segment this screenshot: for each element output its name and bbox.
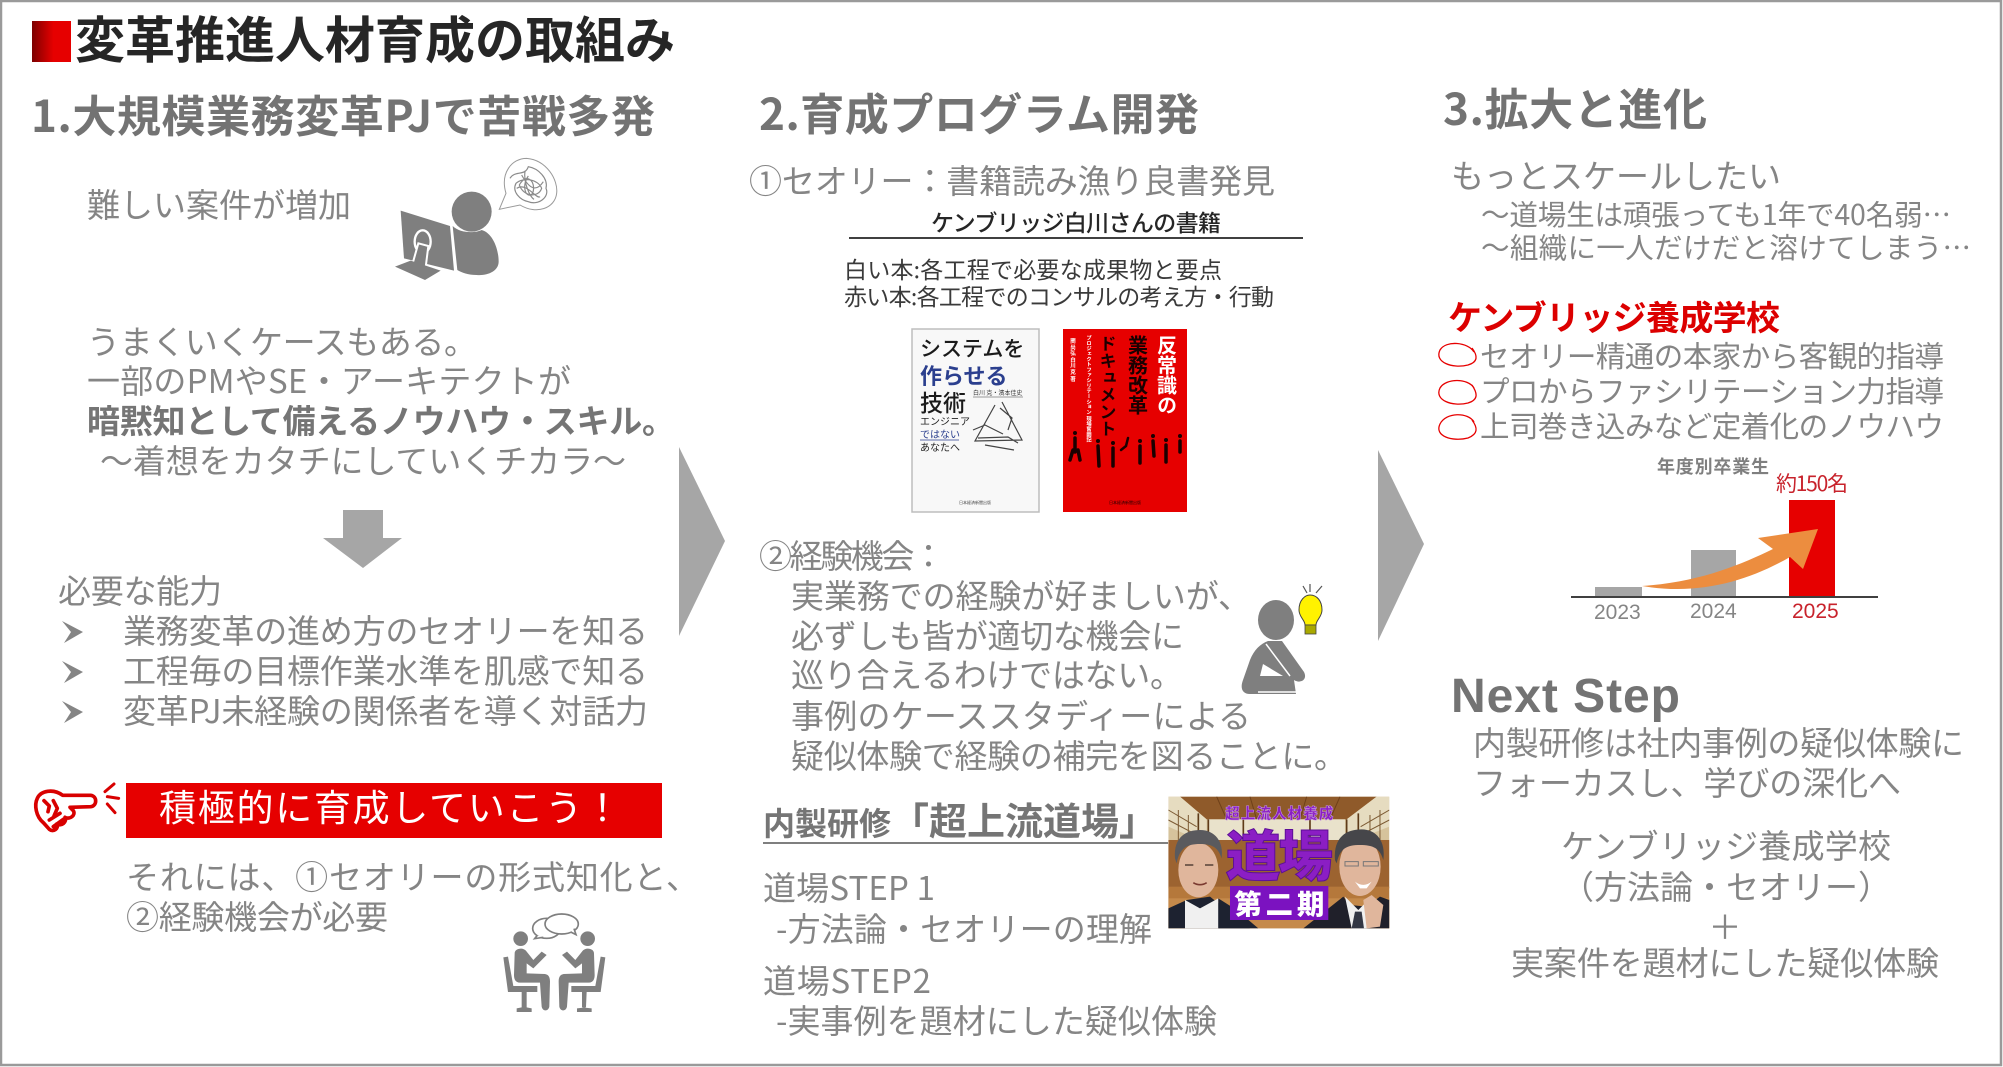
book: white cover: システムを xyxy=(920,333,1024,363)
text: book descriptions: 赤い本:各工程でのコンサルの考え方・行動 xyxy=(844,278,1274,312)
text: required abilities xyxy=(58,565,648,733)
book: white cover: あなたへ xyxy=(920,439,960,454)
book: red cover: ドキュメント xyxy=(1096,335,1120,437)
book: white cover: 日本経済新聞出版 xyxy=(959,499,991,506)
text: experience opportunity: 事例のケーススタディーによる xyxy=(791,690,1251,738)
text: experience opportunity: 疑似体験で経験の補完を図ることに。 xyxy=(791,730,1347,778)
text: want to scale: 〜組織に一人だけだと溶けてしまう… xyxy=(1481,226,1971,267)
text: tacit knowledge: 一部のPMやSE・アーキテクトが xyxy=(87,355,571,403)
text: experience opportunity: 必ずしも皆が適切な機会に xyxy=(791,610,1184,658)
image: dojo thumbnail: 第二期 xyxy=(1234,882,1324,922)
text: want to scale: もっとスケールしたい xyxy=(1451,150,1781,198)
title xyxy=(32,1,675,73)
text: required abilities: 必要な能力 xyxy=(58,565,222,613)
bar chart: graduates by year: 約150名 xyxy=(1776,468,1848,498)
title red square xyxy=(32,21,71,62)
icon: pointing hand xyxy=(36,784,119,831)
image: dojo thumbnail: 超上流人材養成 xyxy=(1225,803,1334,824)
title text: 変革推進人材育成の取組み xyxy=(75,1,675,73)
text: next step: 内製研修は社内事例の疑似体験に xyxy=(1473,717,1964,765)
text: dojo steps: 道場STEP2 xyxy=(763,955,931,1003)
bar chart: graduates by year: 2025 xyxy=(1792,600,1839,623)
text: next step xyxy=(1451,670,1964,805)
text: required abilities: 工程毎の目標作業水準を肌感で知る xyxy=(123,645,648,693)
bar chart: graduates by year xyxy=(1571,453,1878,624)
text: dojo steps: -実事例を題材にした疑似体験 xyxy=(776,995,1217,1043)
text: formula xyxy=(1511,820,1939,985)
book: white cover: 白川 克・濱本佳史 xyxy=(973,388,1022,397)
text: next step: フォーカスし、学びの深化へ xyxy=(1473,757,1901,805)
list: school features: プロからファシリテーション力指導 xyxy=(1480,369,1944,411)
bar chart: graduates by year: 2023 xyxy=(1594,601,1641,624)
text: dojo steps xyxy=(763,862,1217,1043)
arrow: down xyxy=(323,510,402,568)
book: red cover xyxy=(1063,329,1187,512)
book: red cover: 業務改革 xyxy=(1124,335,1152,415)
callout bar: 積極的に育成していこう！ xyxy=(159,778,621,832)
heading 1: 1.大規模業務変革PJで苦戦多発 xyxy=(31,81,655,145)
list: school features: セオリー精通の本家から客観的指導 xyxy=(1480,334,1944,376)
text: theory and experience needed: それには、①セオリーの形式知化と、 xyxy=(126,851,699,899)
bar chart: graduates by year: 年度別卒業生 xyxy=(1657,453,1769,479)
text: want to scale xyxy=(1451,150,1971,267)
text: tacit knowledge: うまくいくケースもある。 xyxy=(87,316,477,364)
text: book descriptions xyxy=(844,251,1274,312)
heading 3: 3.拡大と進化 xyxy=(1443,74,1707,138)
text: dojo steps: -方法論・セオリーの理解 xyxy=(776,903,1152,951)
book: red cover: 関 尚弘 白川 克 著 xyxy=(1069,338,1077,383)
heading: in-house training: 内製研修「超上流道場」 xyxy=(763,791,1157,846)
icon: two people talking xyxy=(503,914,605,1012)
list: school features xyxy=(1439,334,1944,446)
arrow: step 1 to step 2 xyxy=(679,447,725,636)
image: dojo thumbnail: 道場 xyxy=(1226,812,1333,892)
book: white cover: 作らせる xyxy=(920,359,1008,391)
text: formula: ケンブリッジ養成学校 xyxy=(1561,820,1891,868)
book: white cover: 技術 xyxy=(920,384,966,418)
book: white cover: ではない xyxy=(920,426,960,441)
text: theory books: ①セオリー：書籍読み漁り良書発見 xyxy=(749,155,1275,203)
text: theory and experience needed xyxy=(126,851,699,939)
text: tacit knowledge: 暗黙知として備えるノウハウ・スキル。 xyxy=(87,395,675,443)
text: want to scale: 〜道場生は頑張っても1年で40名弱… xyxy=(1481,193,1951,234)
panel: 2 program development xyxy=(749,79,1389,1043)
text: tacit knowledge xyxy=(87,316,675,483)
heading: training school: ケンブリッジ養成学校 xyxy=(1448,291,1780,340)
text: theory and experience needed: ②経験機会が必要 xyxy=(126,891,388,939)
image: dojo thumbnail xyxy=(1168,797,1389,928)
bar chart: graduates by year: 2024 xyxy=(1690,600,1737,623)
text: dojo steps: 道場STEP 1 xyxy=(763,862,935,910)
panel: 1 challenges xyxy=(31,81,699,1012)
text: next step: Next Step xyxy=(1451,670,1680,723)
text: tacit knowledge: 〜着想をカタチにしていくチカラ〜 xyxy=(100,435,626,483)
heading 2: 2.育成プログラム開発 xyxy=(759,79,1199,143)
text: experience opportunity: 巡り合えるわけではない。 xyxy=(791,649,1183,697)
text: formula: 実案件を題材にした疑似体験 xyxy=(1511,937,1939,985)
text: book descriptions: 白い本:各工程で必要な成果物と要点 xyxy=(844,251,1222,285)
icon: thinking person with light bulb xyxy=(1242,584,1322,694)
text: required abilities: 変革PJ未経験の関係者を導く対話力 xyxy=(123,685,648,733)
list: school features: 上司巻き込みなど定着化のノウハウ xyxy=(1480,404,1944,446)
book: red cover: 日本経済新聞出版 xyxy=(1109,499,1141,506)
book: red cover: プロジェクトファシリテーション 現場奮闘記 xyxy=(1085,335,1093,444)
text: cases increasing: 難しい案件が増加 xyxy=(87,179,351,227)
book: red cover: 反常識の xyxy=(1152,335,1182,415)
arrow: step 2 to step 3 xyxy=(1378,450,1424,641)
book: white cover xyxy=(912,329,1039,512)
text: formula: （方法論・セオリー） xyxy=(1561,861,1891,909)
book: white cover: エンジニア xyxy=(920,413,970,428)
arrow: growth xyxy=(1642,529,1818,589)
text: experience opportunity xyxy=(759,530,1347,778)
icon: person at computer with tangled thought xyxy=(395,158,557,280)
text: formula: ＋ xyxy=(1708,901,1742,949)
panel: 3 expansion xyxy=(1439,74,1971,985)
text: experience opportunity: ②経験機会： xyxy=(759,530,945,578)
text: experience opportunity: 実業務での経験が好ましいが、 xyxy=(791,570,1251,618)
text: required abilities: 業務変革の進め方のセオリーを知る xyxy=(123,605,648,653)
subheading: books: ケンブリッジ白川さんの書籍 xyxy=(931,204,1221,238)
